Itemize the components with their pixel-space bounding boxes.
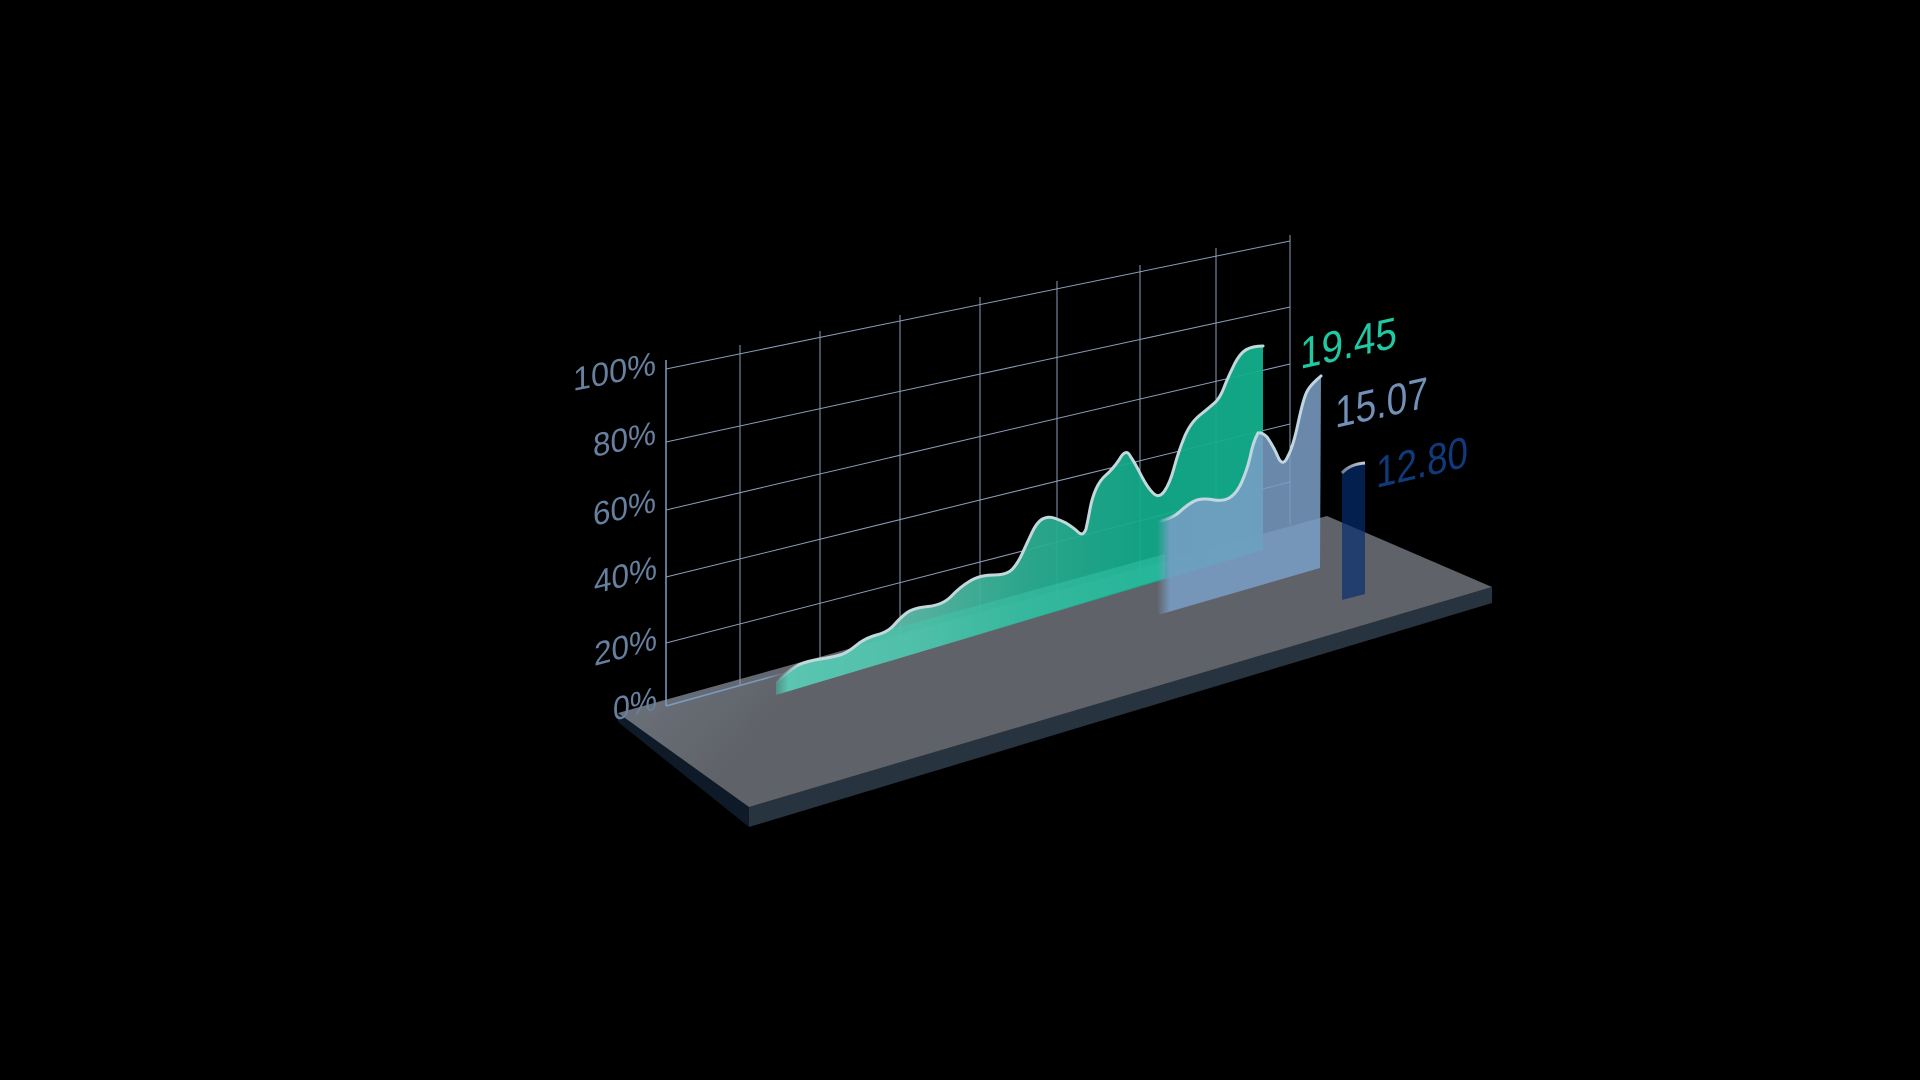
platform left side (618, 713, 749, 827)
label 100%: 100% (573, 346, 656, 399)
label 20%: 20% (594, 621, 657, 674)
blue curve line (1160, 376, 1321, 521)
label 80%: 80% (593, 415, 656, 465)
navy bar fill (1342, 463, 1365, 600)
green curve line (777, 346, 1263, 681)
y axis labels (573, 346, 657, 729)
chart grid (666, 235, 1290, 706)
platform top (618, 516, 1492, 807)
value 12.80: 12.80 (1376, 428, 1468, 498)
navy bar series (1342, 463, 1365, 600)
green strip over platform (776, 554, 1165, 695)
blue area series (1158, 376, 1321, 615)
3D area chart scene (575, 235, 1492, 827)
platform (618, 516, 1492, 827)
green area series (776, 346, 1263, 695)
value 15.07: 15.07 (1335, 369, 1428, 438)
value 19.45: 19.45 (1300, 309, 1397, 379)
label 60%: 60% (593, 483, 656, 534)
label 0%: 0% (613, 681, 657, 729)
green area fill (776, 346, 1263, 695)
navy bar top line (1342, 463, 1365, 473)
label 40%: 40% (594, 550, 657, 602)
blue area fill (1158, 376, 1321, 615)
platform front side (749, 587, 1492, 827)
value labels (1300, 309, 1468, 498)
